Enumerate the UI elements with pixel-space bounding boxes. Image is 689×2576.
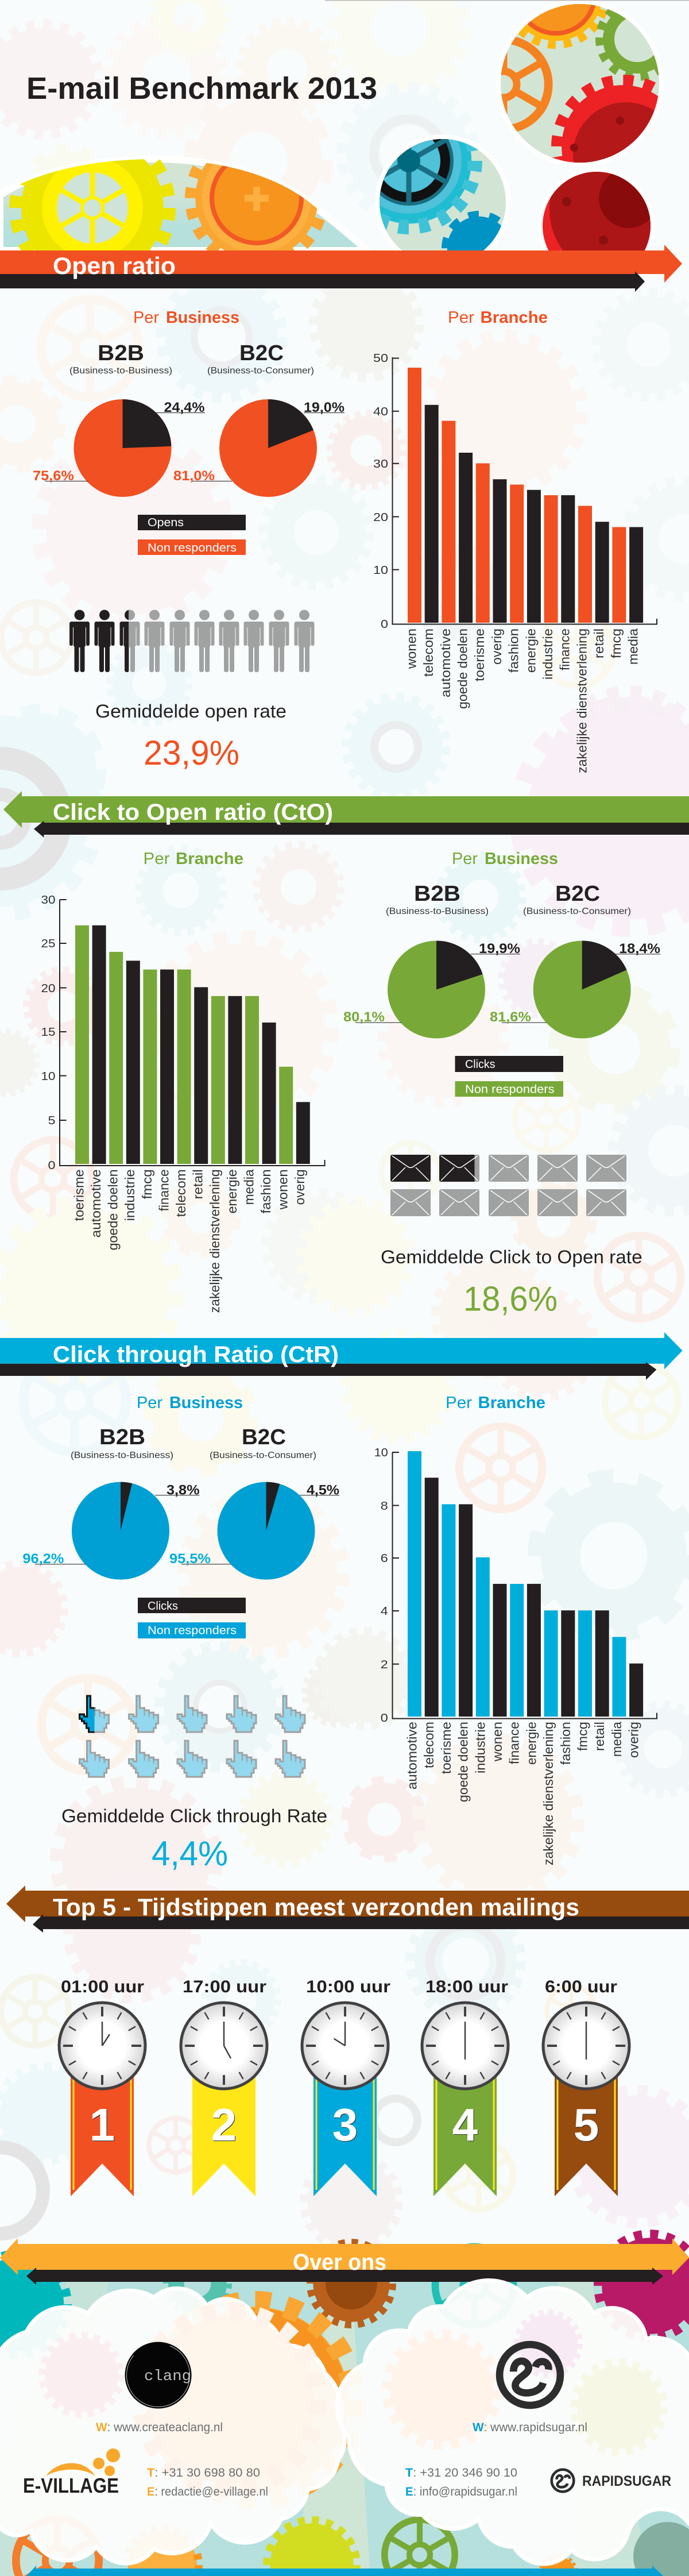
heading: B2B (386, 882, 489, 916)
legend: Clicks (465, 1058, 495, 1071)
rank number: 5 (574, 2099, 599, 2150)
heading: per business: Per (452, 850, 478, 868)
heading: B2C (523, 882, 631, 916)
bar chart: click to open: 20 (41, 982, 55, 995)
heading: B2B: (Business-to-Business) (71, 1451, 173, 1460)
logo: E-Village: E-VILLAGE (23, 2474, 119, 2497)
section banner: Click through Ratio (0, 1332, 683, 1380)
hero hill: yellow and orange gears (3, 157, 358, 250)
heading: per branche: Per (446, 1394, 472, 1412)
bar chart: click through: industrie (473, 1722, 487, 1773)
top edge line (325, 0, 689, 1)
heading: per branche (446, 1394, 545, 1412)
bar chart: click through: fmcg (575, 1722, 590, 1751)
bar chart: open ratio: media (626, 628, 641, 665)
heading: per branche: Branche (480, 308, 548, 327)
bar chart: open ratio: 40 (373, 406, 388, 418)
average label: Gemiddelde open rate (95, 701, 287, 722)
bar chart: click to open: energie (224, 1169, 239, 1213)
legend: Clicks (148, 1600, 178, 1613)
legend: Non responders (465, 1083, 555, 1096)
icon row: people (69, 610, 315, 672)
bar chart: open ratio: telecom (421, 628, 436, 677)
bar chart: click through: 4 (381, 1605, 388, 1618)
average value: 18,6% (463, 1280, 558, 1318)
bar chart: click through: telecom (421, 1722, 436, 1768)
contact: E-Village details: T: +31 30 698 80 80 (147, 2466, 260, 2479)
logo: clang: clang (144, 2367, 191, 2385)
title: E-mail Benchmark 2013 (26, 71, 377, 106)
logo: E-Village (23, 2448, 120, 2497)
clock (181, 2003, 267, 2089)
heading: B2B: (Business-to-Business) (386, 907, 489, 916)
average label: Gemiddelde Click through Rate (61, 1806, 327, 1826)
bar chart: click to open: automotive (88, 1169, 103, 1237)
section banner: Click through Ratio: Click through Ratio (CtR) (53, 1342, 339, 1367)
pie chart: B2C opens: 81,0% (173, 468, 215, 484)
hero: bottom colour section backdrop (0, 2272, 689, 2576)
bar chart: click through: 8 (381, 1500, 388, 1513)
bar chart: click through: overig (626, 1722, 641, 1758)
clock (422, 2003, 508, 2089)
heading: per business: Business (166, 308, 239, 327)
bar chart: open ratio: zakelijke dienstverlening (574, 628, 589, 773)
heading: B2B: B2B (98, 341, 144, 365)
pie chart: B2C clicks: 4,5% (307, 1482, 339, 1498)
section banner: Click to Open ratio (3, 791, 689, 838)
section banner: Open ratio (0, 245, 682, 292)
heading: B2C: B2C (555, 882, 600, 906)
bar chart: open ratio: automotive (438, 628, 453, 697)
ribbon (192, 2068, 256, 2196)
heading: B2C: (Business-to-Consumer) (523, 907, 631, 916)
bar chart: open ratio: fashion (506, 628, 521, 673)
heading: per branche: Branche (478, 1394, 545, 1412)
logo: rapidsugar mark (500, 2344, 560, 2405)
bar chart: click through: goede doelen (456, 1722, 471, 1802)
section banner: Over ons: Over ons (293, 2250, 386, 2275)
bar chart: click to open: telecom (173, 1169, 188, 1217)
bar chart: click to open: industrie (122, 1169, 137, 1221)
bar chart: click to open: 5 (48, 1115, 55, 1127)
contact: Rapidsugar details (405, 2466, 517, 2498)
bar chart: click through: wonen (490, 1722, 505, 1762)
section banner: Over ons (0, 2238, 689, 2285)
heading: B2B (71, 1425, 173, 1460)
heading: per branche (448, 308, 548, 327)
clock medal 5 (543, 1977, 629, 2196)
icon grid: envelopes (390, 1155, 626, 1216)
panel: click through per business (22, 1394, 339, 1873)
heading: B2C: B2C (242, 1425, 286, 1449)
panel: click to open per business (343, 850, 660, 1318)
legend: Non responders (148, 542, 237, 554)
heading: per business: Per (137, 1394, 162, 1412)
pie chart: B2C clicks: 95,5% (169, 1551, 211, 1567)
bar chart: open ratio: 0 (381, 618, 388, 631)
bar chart: click to open: fashion (258, 1169, 273, 1213)
heading: B2C: B2C (239, 341, 284, 365)
contact: E-Village details: E: redactie@e-village.nl (147, 2485, 268, 2498)
bar chart: click through: 6 (381, 1552, 388, 1565)
bar chart: open ratio: industrie (540, 628, 555, 680)
pie chart: B2B opens (33, 399, 205, 497)
ribbon (433, 2068, 497, 2196)
bar chart: click through: retail (592, 1722, 607, 1751)
heading: per business (452, 850, 558, 868)
section banner: Top 5: Top 5 - Tijdstippen meest verzonden mailings (53, 1894, 579, 1921)
section banner: Open ratio: Open ratio (53, 252, 176, 279)
clock (543, 2003, 629, 2089)
background large grey rings (0, 758, 60, 2234)
rank number: 1 (90, 2099, 115, 2150)
heading: B2B (69, 341, 172, 376)
bar chart: click to open: toerisme (71, 1169, 86, 1221)
section banner: Click to Open ratio: Click to Open ratio (CtO) (53, 800, 333, 825)
bar chart: open ratio: 10 (373, 564, 388, 577)
pie chart: B2C clicks (490, 941, 660, 1039)
heading: B2B: B2B (414, 882, 460, 906)
logo: Rapidsugar wordmark (552, 2470, 671, 2492)
hero circle: dark red gear (543, 172, 651, 250)
average value: 23,9% (144, 734, 239, 772)
pie chart: B2B clicks (343, 941, 520, 1039)
pie chart: B2B clicks: 96,2% (22, 1551, 64, 1567)
hero circle: top right gears (459, 0, 688, 211)
bar chart: open ratio: 20 (373, 511, 388, 524)
bar chart: open ratio: wonen (404, 628, 419, 669)
pie chart: B2B clicks: 19,9% (479, 941, 520, 957)
bar chart: click to open: 25 (41, 938, 55, 950)
clock medal 4 (422, 1977, 508, 2196)
heading: per branche: Per (144, 850, 170, 868)
ribbon (313, 2068, 377, 2196)
pie chart: B2B opens: 75,6% (33, 468, 74, 484)
logo: Rapidsugar wordmark: RAPIDSUGAR (582, 2473, 671, 2489)
logo: clang (125, 2342, 192, 2408)
rank number: 2 (211, 2099, 237, 2150)
bar chart: click through: 0 (381, 1712, 388, 1725)
cloud: left partner (0, 2288, 344, 2563)
bar chart: open ratio: 50 (373, 352, 388, 365)
bar chart: click through: media (609, 1722, 624, 1757)
time label: 01:00 uur (61, 1977, 144, 1996)
bar chart: click to open: overig (292, 1169, 307, 1205)
bar chart: click through: toerisme (439, 1722, 454, 1774)
pie chart: B2C opens: 19,0% (304, 400, 344, 415)
bar chart: click to open (41, 894, 325, 1313)
pie chart: B2C clicks: 81,6% (490, 1009, 531, 1025)
bar chart: click to open: 30 (41, 894, 55, 907)
contact: rapidsugar website: W: www.rapidsugar.nl (473, 2421, 587, 2434)
clock (302, 2003, 388, 2089)
rank number: 3 (332, 2099, 358, 2150)
bar chart: click to open: finance (156, 1169, 171, 1211)
bar chart: click through: 10 (374, 1447, 388, 1459)
bar chart: open ratio: goede doelen (455, 628, 470, 709)
time label: 17:00 uur (183, 1977, 266, 1996)
average label: Gemiddelde Click to Open rate (381, 1247, 642, 1267)
legend (138, 1598, 246, 1638)
cloud: right partner (337, 2280, 689, 2564)
clock medal 1 (59, 1977, 145, 2196)
bar chart: click through: energie (524, 1722, 539, 1765)
pie chart: B2B clicks: 3,8% (167, 1482, 200, 1498)
pie chart: B2B clicks: 80,1% (343, 1009, 385, 1025)
bar chart: click to open: 10 (41, 1070, 55, 1083)
heading: per business (137, 1394, 243, 1412)
legend (455, 1056, 563, 1097)
bar chart: click through: 2 (381, 1659, 388, 1671)
bar chart: click through: automotive (404, 1722, 419, 1790)
bar chart: click to open: fmcg (140, 1169, 154, 1199)
heading: per business: Per (133, 308, 159, 327)
bar chart: open ratio: energie (523, 628, 538, 673)
bar chart: click through: fashion (558, 1722, 573, 1765)
bar chart: open ratio: finance (558, 628, 572, 670)
bar chart: click to open: wonen (276, 1169, 291, 1210)
contact: E-Village details (147, 2466, 268, 2498)
heading: B2B: B2B (99, 1425, 145, 1449)
contact: clang website: W: www.createaclang.nl (96, 2421, 223, 2434)
footer colourful gears (0, 2235, 689, 2576)
contact: Rapidsugar details: E: info@rapidsugar.nl (405, 2485, 517, 2498)
bar chart: click to open: media (241, 1169, 256, 1205)
bar chart: click to open: 0 (48, 1159, 55, 1172)
time label: 10:00 uur (306, 1977, 390, 1996)
pie chart: B2C opens (173, 399, 344, 497)
rank number: 4 (452, 2099, 478, 2150)
heading: per business: Business (485, 850, 558, 868)
panel: click to open per branche (41, 850, 325, 1313)
heading: per business: Business (169, 1394, 243, 1412)
clock medal 2 (181, 1977, 267, 2196)
bar chart: open ratio: fmcg (609, 628, 624, 658)
heading: B2C: (Business-to-Consumer) (210, 1451, 316, 1460)
heading: B2C: (Business-to-Consumer) (207, 366, 314, 376)
bar chart: click to open: goede doelen (106, 1169, 121, 1250)
panel: open ratio per branche (373, 308, 657, 773)
heading: B2B: (Business-to-Business) (69, 366, 172, 376)
icon grid: pointer hands (79, 1696, 305, 1777)
footer bar (26, 2566, 663, 2576)
contact: Rapidsugar details: T: +31 20 346 90 10 (405, 2466, 517, 2479)
pie chart: B2C clicks: 18,4% (619, 941, 660, 957)
time label: 18:00 uur (425, 1977, 508, 1996)
bar chart: click through (374, 1447, 657, 1865)
heading: per business (133, 308, 239, 327)
heading: B2C (207, 341, 314, 376)
legend: Non responders (148, 1625, 237, 1637)
pie chart: B2B opens: 24,4% (164, 400, 204, 415)
heading: per branche: Per (448, 308, 474, 327)
hero circle: blue gear (375, 134, 506, 250)
bar chart: click to open: retail (191, 1169, 206, 1199)
bar chart: open ratio (373, 352, 657, 773)
clock (59, 2003, 145, 2089)
pie chart: B2B clicks (22, 1482, 200, 1580)
bar chart: click through: zakelijke dienstverlening (541, 1722, 556, 1865)
time label: 6:00 uur (545, 1977, 617, 1996)
bar chart: open ratio: toerisme (472, 628, 487, 681)
bar chart: open ratio: 30 (373, 458, 388, 471)
average value: 4,4% (152, 1834, 228, 1873)
heading: B2C (210, 1425, 316, 1460)
ribbon (555, 2068, 618, 2196)
panel: click through per branche (374, 1394, 657, 1865)
heading: per branche: Branche (176, 850, 243, 868)
legend (138, 515, 246, 555)
section banner: Top 5 (6, 1885, 689, 1933)
ribbon (71, 2068, 134, 2196)
bar chart: click through: finance (507, 1722, 522, 1764)
heading: per branche (144, 850, 243, 868)
bar chart: click to open: 15 (41, 1026, 55, 1039)
bar chart: open ratio: overig (489, 628, 504, 665)
legend: Opens (148, 516, 184, 529)
pie chart: B2C clicks (169, 1482, 339, 1580)
bar chart: open ratio: retail (591, 628, 606, 658)
clock medal 3 (302, 1977, 390, 2196)
bar chart: click to open: zakelijke dienstverlening (207, 1169, 222, 1313)
panel: open ratio per business (33, 308, 344, 772)
